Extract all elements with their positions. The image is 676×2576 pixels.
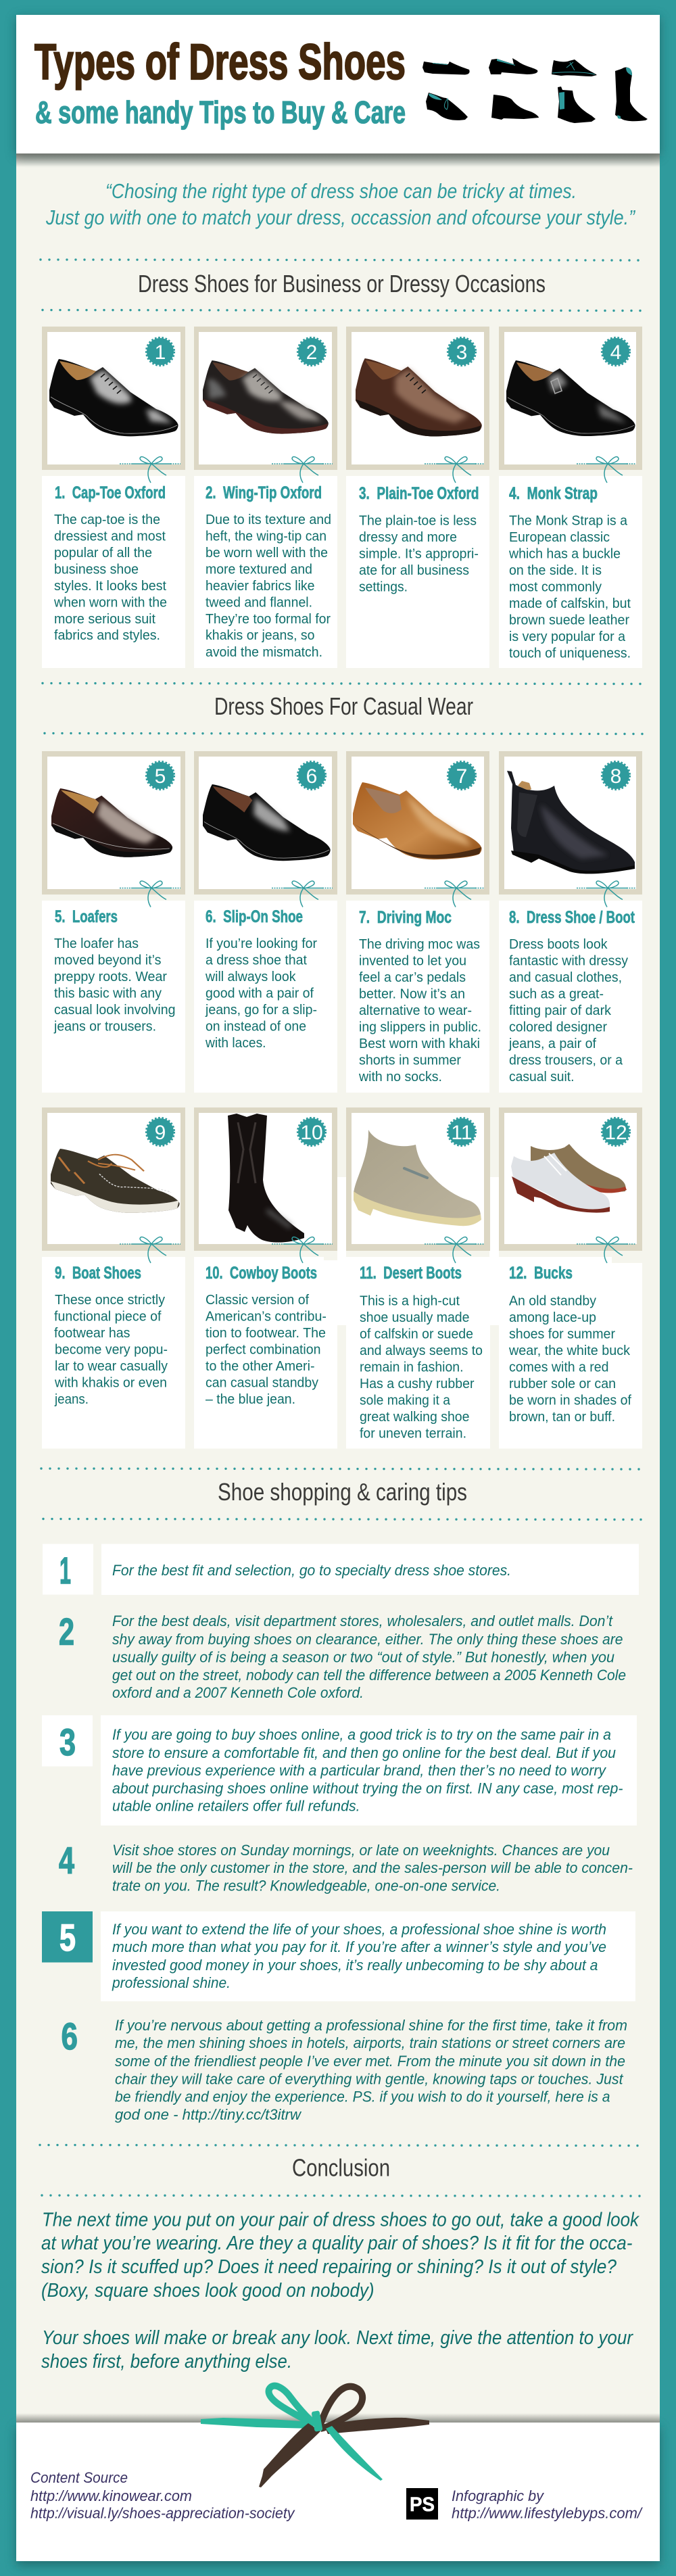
card body: casual look involving [54,1003,176,1018]
card body: be worn well with the [206,546,328,560]
card body: with khakis or even [54,1375,167,1390]
card body [358,937,481,1084]
number badge: 8 [610,765,621,788]
card title: 11. Desert Boots [360,1264,462,1283]
card body: this basic with any [54,986,162,1001]
card body: with laces. [205,1036,266,1051]
card body: avoid the mismatch. [206,645,322,660]
card 4: monk strap [499,327,642,668]
card body [54,1293,168,1407]
tip number: 1 [59,1549,71,1592]
card body: perfect combination [206,1343,320,1358]
card body: remain in fashion. [360,1360,464,1375]
card body [508,514,631,661]
card body: An old standby [509,1294,596,1309]
heading: conclusion: Conclusion [292,2154,390,2181]
source credits [30,2469,295,2522]
tip number: 4 [59,1839,74,1882]
card body: fitting pair of dark [509,1003,612,1018]
shoe image: plain-toe oxford [356,358,482,436]
tip text: Visit shoe stores on Sunday mornings, or late on weeknights. Chances are you [112,1842,610,1859]
tip text [112,1726,623,1815]
card body: Classic version of [206,1293,309,1308]
text panel [194,476,337,668]
tip text: chair they will take care of everything with gentle, knowing taps or touches. Just [115,2070,624,2088]
card body: The plain-toe is less [359,514,477,529]
conclusion text: sion? Is it scuffed up? Does it need repairing or shining? Is it out of style? [41,2256,617,2278]
number badge: 2 [306,341,317,364]
tip number: 3 [59,1721,76,1763]
card body: European classic [509,530,610,545]
text panel [42,476,185,668]
card body: shoes for summer [509,1327,615,1341]
shoe image: monk strap [506,360,635,436]
card body: tweed and flannel. [206,595,312,610]
card body: heavier fabrics like [206,579,315,594]
card body: lar to wear casually [55,1359,168,1374]
shoe image: bucks pair [511,1144,627,1213]
card body: shoe usually made [360,1310,469,1325]
ribbon bow [577,1237,636,1263]
source credits: http://visual.ly/shoes-appreciation-society [30,2504,295,2522]
tip 2 [59,1611,626,1701]
number badge: 9 [155,1122,166,1144]
card 7: driving moc [346,751,489,1093]
subtitle: & some handy Tips to Buy & Care [35,95,406,130]
card body: The loafer has [54,936,139,951]
ribbon bow [120,881,180,907]
card body: better. Now it’s an [359,987,465,1002]
card body: good with a pair of [206,986,314,1001]
number box [42,1715,93,1766]
text panel [499,1257,642,1448]
intro quote: “Chosing the right type of dress shoe can be tricky at times. [105,179,577,203]
ribbon bow [577,457,636,483]
card body: If you’re looking for [206,936,317,951]
tip text: be friendly and enjoy the experience. PS. if you wish to do it yourself, here is a [115,2088,610,2105]
number badge [297,1118,326,1145]
title: Types of Dress Shoes [34,34,406,90]
card body: American’s contribu- [206,1309,327,1324]
card title: 3. Plain-Toe Oxford [359,484,479,503]
card body: functional piece of [54,1309,162,1324]
card body: dressiest and most [54,529,166,544]
shoe image: slip-on shoe [203,784,331,861]
card title: 4. Monk Strap [509,484,598,503]
card body: with no socks. [358,1070,442,1084]
card body: footwear has [54,1326,130,1341]
card body: a dress shoe that [206,953,307,968]
card body: great walking shoe [360,1410,469,1425]
tip number: 2 [59,1611,74,1652]
card 2: wing-tip oxford [194,327,337,668]
number badge [602,761,630,790]
text panel [194,901,337,1093]
card body: more serious suit [54,612,155,627]
card body: tion to footwear. The [206,1326,326,1341]
heading: casual wear: Dress Shoes For Casual Wear [214,692,473,720]
ribbon bow [425,1237,484,1263]
card body [508,937,628,1084]
card body: sole making it a [360,1393,451,1408]
number badge: 5 [155,765,166,788]
card body: wear, the white buck [508,1343,631,1358]
shoe image: chelsea boot [507,771,635,874]
card body: brown suede leather [509,613,629,627]
number badge [448,1118,476,1145]
number badge [146,1118,174,1145]
icon: PS logo [406,2488,438,2519]
conclusion text: at what you’re wearing. Are they a quality pair of shoes? Is it fit for the occa- [41,2233,633,2254]
tip text: utable online retailers offer full refunds. [112,1797,360,1815]
card body: styles. It looks best [54,579,166,594]
number badge: 4 [610,341,621,364]
shoe image: cowboy boot [228,1114,304,1243]
text panel [194,1257,337,1448]
card 12: bucks [499,1107,642,1448]
text box [101,1911,635,2001]
text box [101,1544,639,1595]
tip 6 [61,2015,627,2123]
number badge: 7 [456,765,467,788]
card body: shorts in summer [359,1053,461,1068]
tip text: If you’re nervous about getting a professional shine for the first time, take it from [115,2017,627,2034]
text box [101,1715,637,1826]
card title: 12. Bucks [509,1264,573,1283]
card body: for uneven terrain. [360,1427,466,1441]
shoe image: driving moc [353,782,482,859]
card body: The driving moc was [359,937,480,952]
infographic credit: Infographic by [452,2487,545,2504]
shoe image: boat shoe [51,1149,180,1213]
number badge: 10 [300,1122,323,1144]
tip text [112,1921,606,1991]
tip 1 [43,1544,639,1595]
text panel [42,1257,185,1448]
text panel [346,1257,490,1448]
number badge: 6 [306,765,317,788]
tip text: will be the only customer in the store, and the sales-person will be able to concen- [112,1859,633,1876]
tip text [112,1613,626,1701]
card body: The Monk Strap is a [509,514,628,529]
tip text: professional shine. [112,1974,231,1991]
shoelace bow [201,2386,429,2487]
tip text: some of the friendliest people I’ve ever met. From the minute you sit down in the [115,2053,625,2070]
card body: The cap-toe is the [54,512,160,527]
ribbon bow [272,881,333,907]
card body: invented to let you [359,953,466,968]
card 6: slip-on shoe [194,751,337,1093]
source credits: http://www.kinowear.com [30,2487,192,2504]
card body: which has a buckle [508,546,621,561]
tip text: If you want to extend the life of your shoes, a professional shoe shine is worth [112,1921,606,1938]
card body: casual suit. [509,1070,575,1084]
tip text: oxford and a 2007 Kenneth Cole oxford. [112,1684,364,1701]
ribbon bow [425,457,484,483]
card body: business shoe [54,563,139,577]
card body: is very popular for a [509,629,626,644]
card title: 10. Cowboy Boots [206,1264,317,1283]
tip text: shy away from buying shoes on clearance, either. The only thing these shoes are [112,1631,623,1648]
number badge: 3 [456,341,467,364]
tip 4 [59,1839,633,1894]
tip text: For the best fit and selection, go to specialty dress shoe stores. [112,1562,511,1579]
text panel [346,901,489,1093]
heading: tips: Shoe shopping & caring tips [218,1478,467,1506]
ribbon bow [120,1237,180,1263]
number badge: 12 [604,1122,627,1144]
card body: jeans, go for a slip- [205,1003,317,1018]
card body: preppy roots. Wear [54,970,167,984]
card 1: cap-toe oxford [42,327,185,668]
conclusion text [41,2210,640,2372]
card body: most commonly [509,580,602,595]
card body: rubber sole or can [509,1377,616,1391]
shoe image: cap-toe oxford [49,359,178,436]
card body: when worn with the [53,595,167,610]
card title: 2. Wing-Tip Oxford [206,483,322,502]
card body: alternative to wear- [359,1003,472,1018]
text panel [42,901,185,1093]
card body: and always seems to [360,1343,483,1358]
card body: be worn in shades of [509,1393,631,1408]
card body [360,1294,483,1441]
number badge: 1 [155,341,166,364]
card body: comes with a red [509,1360,608,1375]
card body: ate for all business [359,563,469,578]
card title: 9. Boat Shoes [55,1264,141,1283]
ribbon bow [425,881,484,907]
text panel [346,476,489,668]
card body: jeans. [54,1392,89,1407]
card 9: boat shoes [42,1107,185,1448]
tip number: 5 [59,1916,76,1959]
card body: on instead of one [206,1020,306,1034]
ribbon bow [272,457,333,483]
number badge [448,761,476,790]
card body: Due to its texture and [206,512,331,527]
card body: khakis or jeans, so [206,628,315,643]
shoe image: desert boot [354,1130,481,1226]
number badge [448,338,476,365]
infographic credit: http://www.lifestylebyps.com/ [452,2504,643,2522]
shoe image: wing-tip oxford [203,360,329,434]
ribbon bow [120,457,180,483]
conclusion text: shoes first, before anything else. [41,2351,292,2372]
intro quote [45,179,635,229]
card body: among lace-up [509,1310,596,1325]
number badge: 11 [451,1122,473,1144]
tip text: store to ensure a comfortable fit, and then go online for the best deal. But if you [112,1744,616,1761]
card title: 5. Loafers [55,907,118,926]
card body: made of calfskin, but [509,596,631,611]
card title: 7. Driving Moc [359,908,452,927]
tip text: trate on you. The result? Knowledgeable, one-on-one service. [112,1877,500,1894]
card body: jeans or trousers. [53,1020,156,1034]
tip text: get out on the street, nobody can tell the difference between a 2005 Kenneth Cole [112,1667,626,1684]
tip 5 [42,1911,635,2001]
ribbon bow [577,881,636,907]
tip text: me, the men shining shoes in hotels, airports, train stations or street corners are [115,2034,625,2051]
card body: Best worn with khaki [359,1036,480,1051]
icon: PS logo: PS [410,2494,435,2516]
card body: such as a great- [509,987,604,1002]
card body: to the other Ameri- [206,1359,315,1374]
tip text: For the best deals, visit department stores, wholesalers, and outlet malls. Don’t [112,1613,614,1629]
card body: moved beyond it’s [54,953,161,968]
card body: will always look [205,970,296,984]
card body: – the blue jean. [206,1392,295,1407]
card 5: loafers [42,751,185,1093]
number box [43,1544,93,1594]
card body: colored designer [509,1020,607,1034]
card body: on the side. It is [509,563,602,578]
card body: Dress boots look [509,937,608,952]
card body: Has a cushy rubber [360,1377,475,1391]
card body: and casual clothes, [509,970,622,985]
card body: dress trousers, or a [509,1053,623,1068]
tip text [115,2017,627,2123]
number box [42,1911,93,1962]
tip number: 6 [61,2015,78,2057]
card body: fabrics and styles. [54,628,160,643]
card body: more textured and [206,563,312,577]
shoe image: loafers [51,788,172,857]
tip text: usually guilty of is being a season or two “out of style.” But honestly, when you [112,1648,614,1666]
card body: ing slippers in public. [359,1020,481,1034]
tip text [112,1842,633,1894]
footer panel [16,2413,660,2565]
card title: 6. Slip-On Shoe [206,907,303,926]
tip text: much more than what you pay for it. If you’re after a winner’s style and you’ve [112,1938,606,1955]
card body [53,512,167,643]
number badge [146,338,174,365]
card body: brown, tan or buff. [509,1410,615,1425]
card title: 8. Dress Shoe / Boot [509,908,635,927]
card body [508,1294,631,1425]
card body: feel a car’s pedals [359,970,466,985]
number badge [602,338,630,365]
card body: They’re too formal for [206,612,331,627]
card body: simple. It’s appropri- [359,546,479,561]
card body [359,514,479,595]
text panel [499,476,642,668]
card body: jeans, a pair of [508,1036,596,1051]
card 11: desert boots [346,1107,490,1448]
card 8: dress shoe / boot [499,751,642,1093]
tip text: god one - http://tiny.cc/t3itrw [115,2106,302,2123]
card body [206,1293,327,1407]
card body: popular of all the [54,546,152,560]
card body: touch of uniqueness. [509,646,631,661]
number badge [602,1118,630,1145]
card body: become very popu- [55,1343,168,1358]
heading: business shoes: Dress Shoes for Business or Dressy Occasions [138,270,546,297]
card body: This is a high-cut [360,1294,460,1309]
card body: settings. [359,580,408,595]
card body: can casual standby [206,1375,318,1390]
card title: 1. Cap-Toe Oxford [55,483,166,502]
header panel [16,15,660,167]
card body [53,936,176,1034]
card body: dressy and more [359,530,457,545]
card body: fantastic with dressy [509,953,628,968]
number badge [297,761,326,790]
card body: of calfskin or suede [360,1327,473,1341]
number badge [297,338,326,365]
number badge [146,761,174,790]
tip text: about purchasing shoes online without trying the on first. IN any case, most rep- [112,1780,623,1797]
text panel [499,901,642,1093]
source credits: Content Source [30,2469,128,2486]
card 3: plain-toe oxford [346,327,489,668]
tip text: If you are going to buy shoes online, a good trick is to try on the same pair in a [112,1726,611,1743]
card body [205,936,317,1051]
conclusion text: Your shoes will make or break any look. Next time, give the attention to your [42,2327,633,2349]
tip text: invested good money in your shoes, it’s really unbecoming to be shy about a [112,1957,598,1974]
infographic credit [452,2487,643,2522]
card body [206,512,331,660]
tip 3 [42,1715,637,1826]
card body: These once strictly [55,1293,165,1308]
tip text: have previous experience with a particular brand, then ther’s no need to worry [112,1762,607,1779]
ribbon bow [272,1237,333,1263]
card body: heft, the wing-tip can [206,529,327,544]
conclusion text: (Boxy, square shoes look good on nobody) [41,2280,375,2301]
card 10: cowboy boots [194,1107,337,1448]
icon: shoe silhouettes [422,58,648,123]
